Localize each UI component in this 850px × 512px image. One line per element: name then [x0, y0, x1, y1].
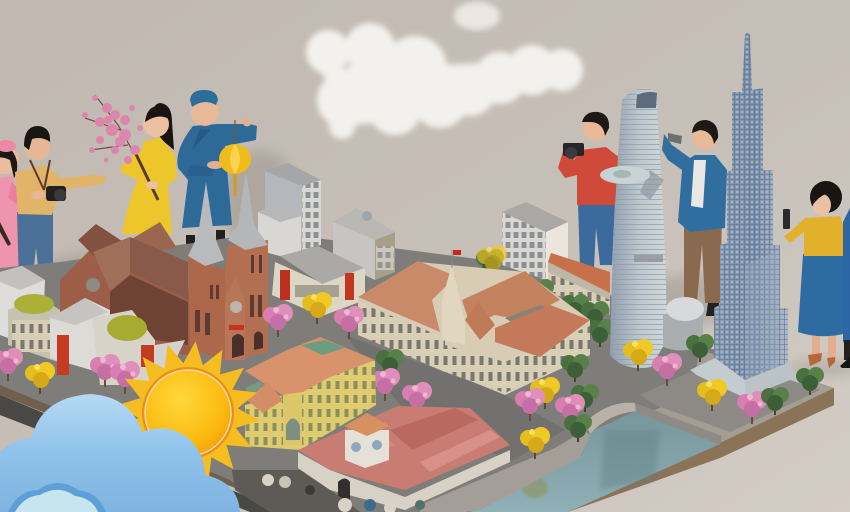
city platform	[0, 232, 834, 512]
city hall	[358, 250, 590, 395]
blossom branch	[82, 95, 143, 164]
landmark 81 tower	[690, 32, 800, 402]
central street trees	[263, 292, 432, 415]
person: man in blue jacket with phone	[662, 120, 727, 316]
cathedral	[60, 172, 268, 362]
green trees behind city hall	[476, 245, 614, 347]
person: woman in yellow top and blue skirt	[783, 181, 847, 368]
beige apartment block	[333, 208, 395, 280]
white office building	[502, 202, 568, 280]
person: man in red sweater	[558, 112, 620, 268]
person: man in blue ao dai with lantern	[177, 90, 257, 265]
left street trees	[0, 348, 140, 394]
bitexco tower	[600, 88, 667, 368]
saigon central post office	[245, 337, 376, 450]
grey high-rise	[258, 163, 321, 262]
ben thanh market	[298, 406, 510, 510]
sun	[109, 334, 267, 492]
building with red banners	[272, 246, 365, 316]
road with traffic	[345, 335, 565, 462]
sun rays	[109, 334, 267, 492]
person: woman in yellow ao dai	[120, 103, 177, 234]
left shophouses	[0, 266, 185, 385]
river	[420, 411, 720, 512]
person: woman in pink ao dai	[0, 140, 40, 275]
right waterfront plaza	[640, 372, 820, 432]
inner cloud	[8, 483, 106, 512]
sun disc	[137, 362, 239, 464]
market stalls	[232, 470, 425, 512]
person: partial man at right edge	[840, 208, 850, 368]
river park trees	[515, 354, 599, 459]
museum dome	[663, 297, 704, 351]
soft shadows on the backdrop	[40, 150, 850, 375]
blue cloud	[0, 394, 240, 512]
lantern	[219, 120, 251, 196]
small white cloud	[454, 2, 500, 30]
tower plaza trees	[623, 334, 824, 424]
white cloud	[306, 23, 583, 139]
school with orange roof	[548, 253, 610, 315]
person: man with camera	[15, 126, 106, 295]
bridge and embankment	[585, 403, 722, 445]
